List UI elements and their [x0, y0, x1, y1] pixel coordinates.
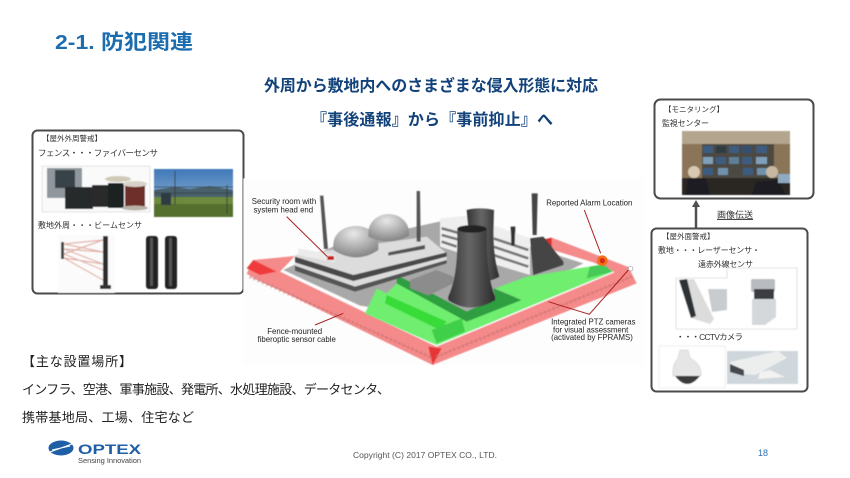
diagram: plant site with perimeter zones	[243, 178, 643, 365]
rear building	[440, 193, 563, 275]
callout: security room	[252, 197, 316, 214]
callout: fence-mounted sensor	[258, 327, 336, 344]
panel heading: outdoor area: 【屋外面警戒】	[662, 231, 714, 241]
text block: main installation locations: インフラ、空港、軍事施設、発電所、水処理施設、データセンタ、	[22, 382, 390, 397]
text block: main installation locations	[22, 354, 390, 425]
red detection band	[247, 238, 637, 365]
photo: fiber sensor equipment	[42, 166, 150, 212]
ground platform	[283, 220, 583, 322]
photo: box camera	[727, 351, 798, 384]
arrow: image transmission	[692, 200, 700, 228]
cooling tower front	[448, 225, 495, 307]
title: 2-1. 防犯関連	[55, 30, 193, 54]
label: site perimeter beam sensor: 敷地外周・・・ビームセンサ	[38, 220, 142, 230]
callout: fence-mounted sensor: fiberoptic sensor cable	[258, 335, 336, 344]
panel: outdoor area security	[652, 228, 808, 392]
footer: copyright: Copyright (C) 2017 OPTEX CO., LTD.	[353, 450, 497, 460]
label: laser and far-infrared sensors	[658, 245, 760, 269]
photo: fence installation	[154, 169, 233, 217]
callout: integrated PTZ cameras: for visual assessment	[553, 325, 629, 334]
text block: main installation locations: 携帯基地局、工場、住宅など	[22, 410, 194, 425]
callout: integrated PTZ cameras	[551, 317, 636, 342]
green camera zones	[365, 264, 613, 345]
logo: OPTEX: Sensing Innovation	[78, 456, 141, 465]
callout: reported alarm location: Reported Alarm Location	[546, 199, 632, 208]
callout: security room: system head end	[254, 205, 313, 214]
text block: main installation locations: 【主な設置場所】	[22, 354, 132, 369]
label: monitoring center: 監視センター	[662, 118, 709, 128]
panel: monitoring	[654, 100, 814, 198]
alarm marker	[597, 255, 633, 271]
photo: beam sensor poles	[146, 236, 177, 289]
panel: outdoor perimeter security	[32, 130, 244, 294]
label: image transmission: 画像伝送	[717, 209, 753, 220]
callout: fence-mounted sensor: Fence-mounted	[267, 327, 322, 336]
callout: security room: Security room with	[252, 197, 316, 206]
photo: beam sensor illustration	[58, 235, 115, 293]
panel heading: monitoring: 【モニタリング】	[664, 104, 724, 114]
photo: dome camera	[659, 346, 725, 388]
label: fence fiber sensor: フェンス・・・ファイバーセンサ	[38, 148, 158, 158]
label: laser and far-infrared sensors: 敷地・・・レーザーセンサ・	[658, 245, 760, 255]
callout: integrated PTZ cameras: (activated by FPRAMS)	[551, 333, 633, 342]
logo: OPTEX	[48, 440, 142, 465]
subtitle: headline text: 『事後通報』から『事前抑止』へ	[311, 110, 553, 129]
photo: monitoring room	[682, 131, 790, 195]
label: CCTV camera: ・・・CCTVカメラ	[676, 332, 743, 342]
photo: laser and infrared sensors	[676, 268, 797, 329]
callout: integrated PTZ cameras: Integrated PTZ cameras	[551, 317, 636, 326]
cooling tower rear	[467, 208, 499, 281]
main reactor building	[295, 191, 447, 292]
leader lines	[287, 210, 628, 325]
label: laser and far-infrared sensors: 遠赤外線センサ	[698, 259, 753, 269]
page number: 18	[758, 448, 768, 458]
logo: OPTEX: OPTEX	[78, 441, 142, 457]
subtitle: headline text: 外周から敷地内へのさまざまな侵入形態に対応	[264, 76, 598, 95]
small block building	[410, 270, 453, 296]
subtitle: headline text	[264, 76, 598, 129]
panel heading: outdoor perimeter: 【屋外外周警戒】	[42, 133, 102, 143]
